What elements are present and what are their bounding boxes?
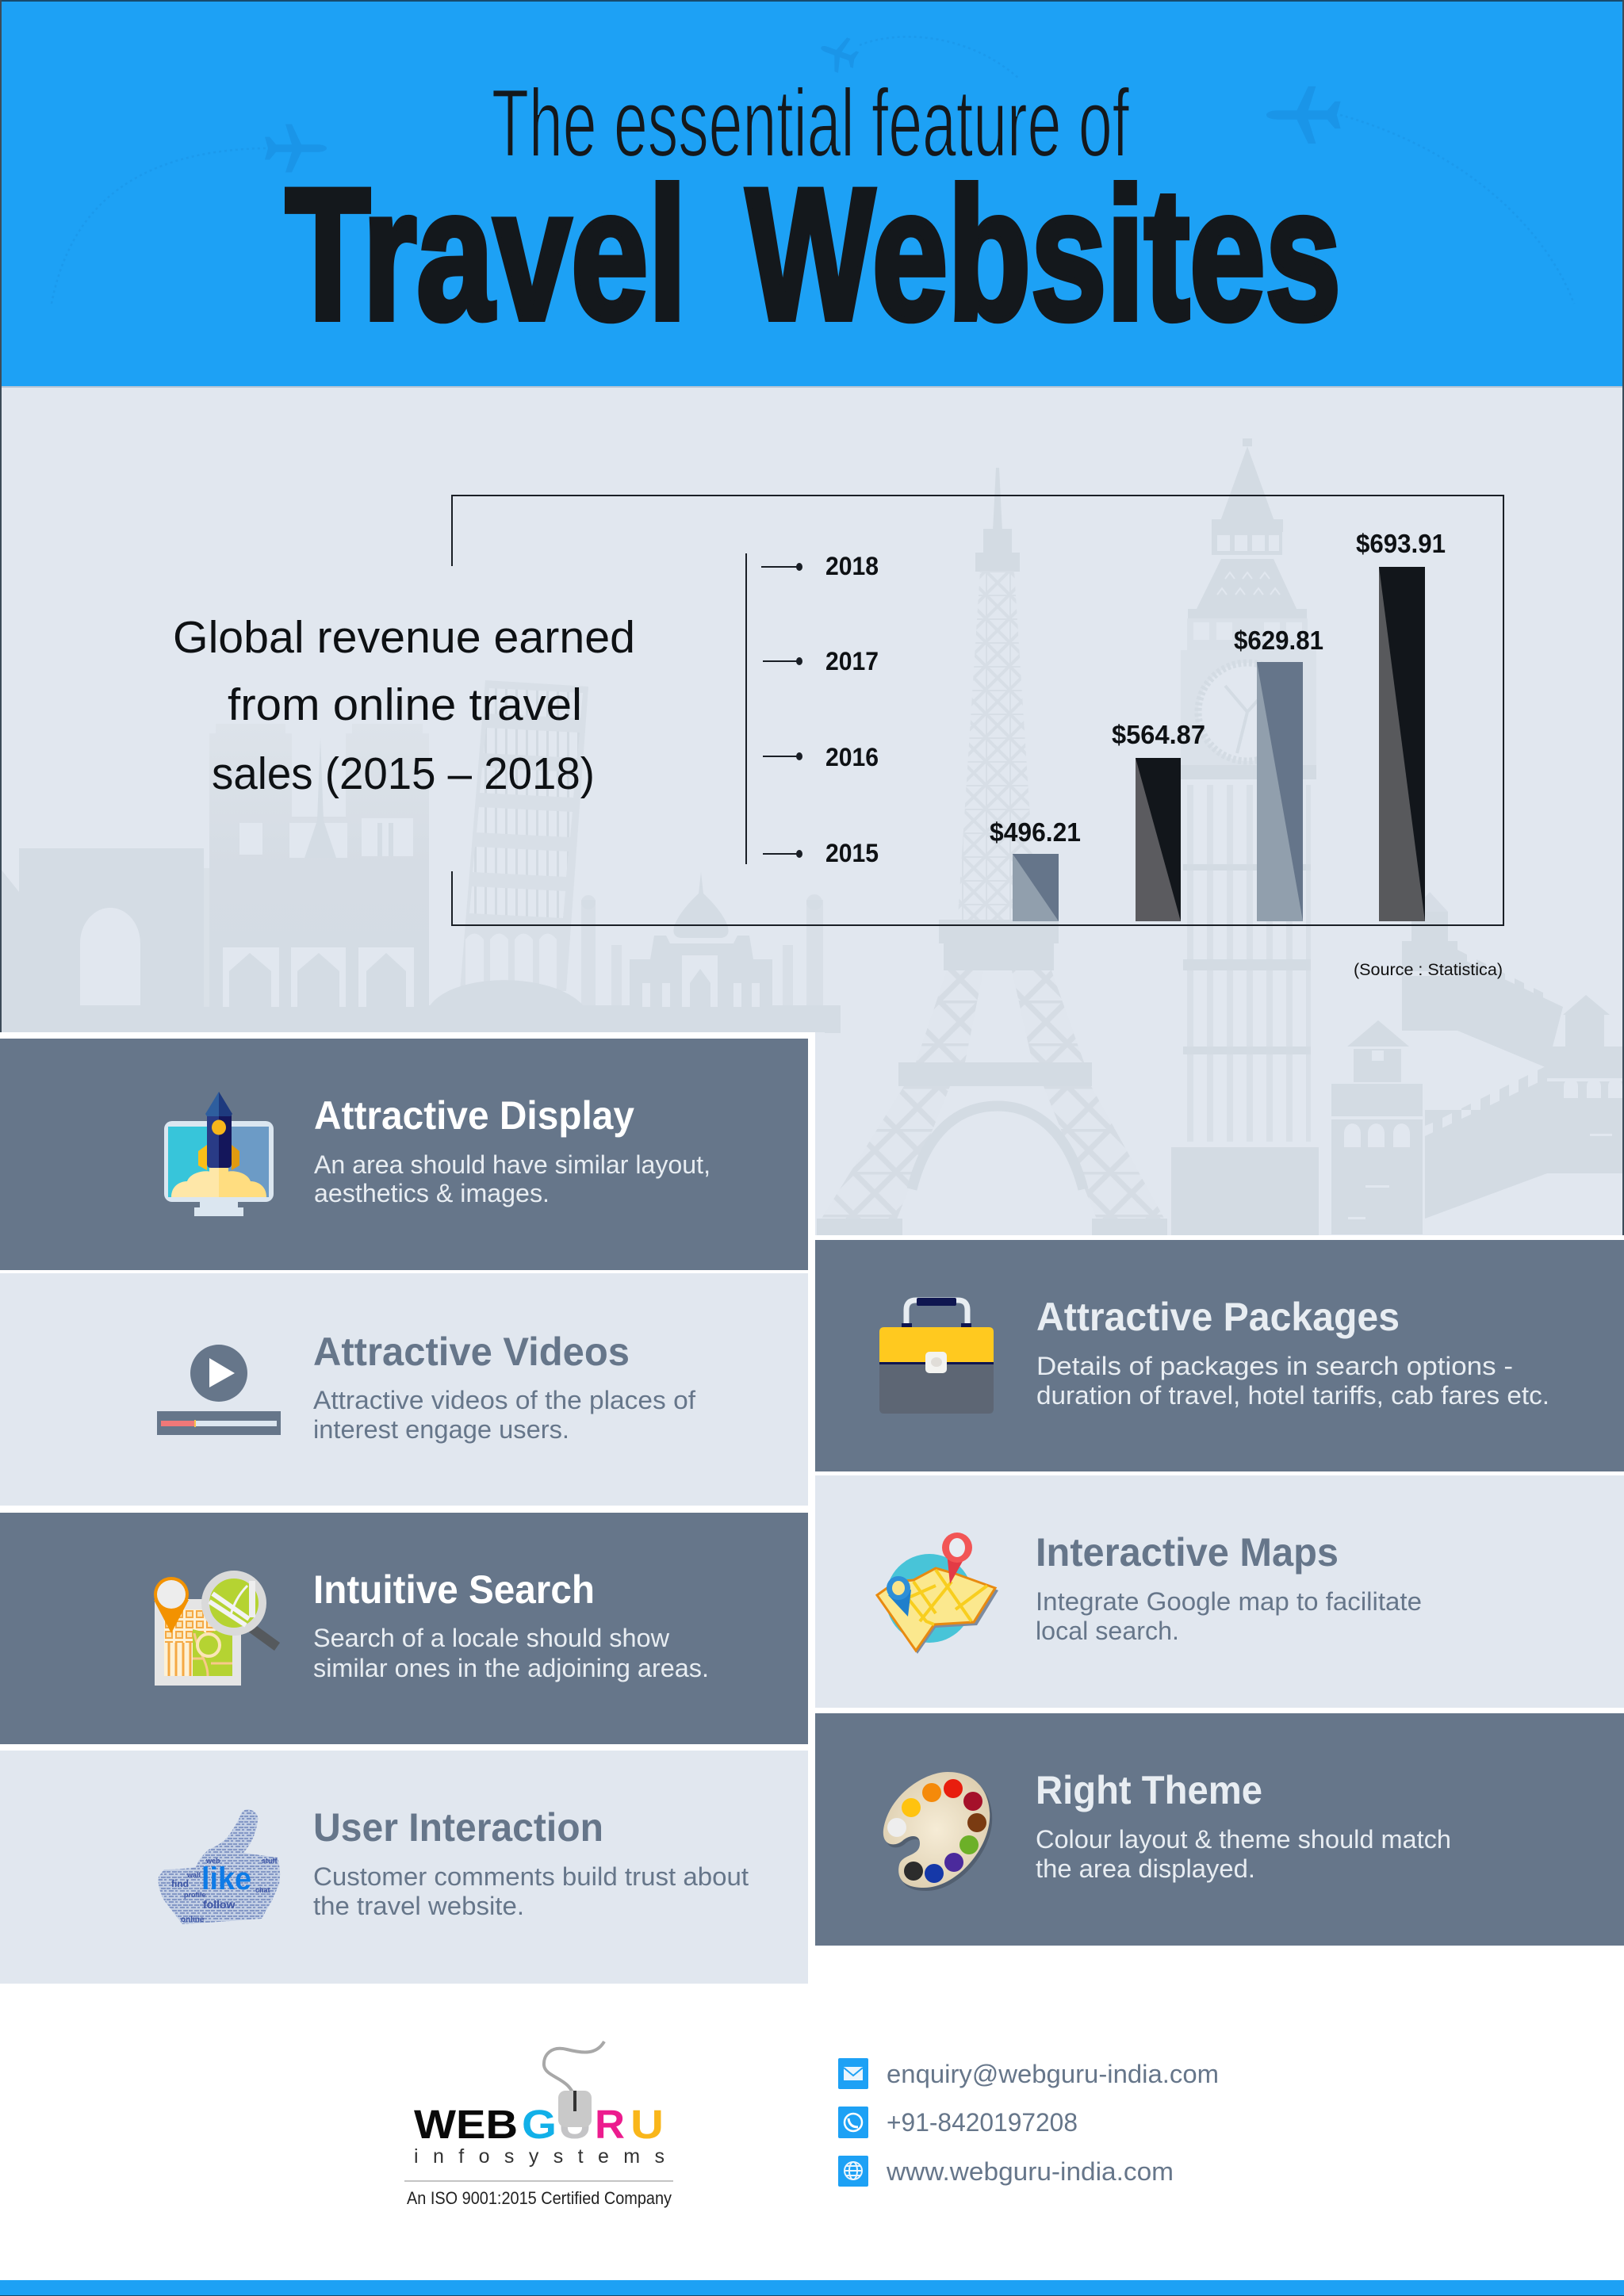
panel: interactive maps <box>815 1475 1624 1708</box>
text block: Details of packages in search options - <box>1036 1352 1513 1380</box>
icon: paint palette <box>883 1772 992 1891</box>
text block: Attractive videos of the places of <box>313 1386 695 1414</box>
heading: Interactive Maps <box>1036 1530 1339 1575</box>
heading: Attractive Display <box>314 1093 634 1138</box>
logo: webguru infosystems: U <box>558 2102 592 2147</box>
heading: Intuitive Search <box>313 1567 595 1612</box>
background skyline: great wall <box>1331 892 1624 1234</box>
icon: thumbs up word cloud: profile <box>184 1891 206 1899</box>
panel: right theme <box>815 1713 1624 1946</box>
icon: briefcase <box>879 1298 994 1414</box>
text block: Customer comments build trust about <box>313 1862 749 1891</box>
panel: intuitive search <box>0 1513 808 1744</box>
bar chart: $693.91 <box>1356 529 1446 558</box>
panel: chart <box>173 496 1503 979</box>
taj mahal <box>581 900 596 1007</box>
icon: thumbs up word cloud: stuff <box>262 1857 278 1865</box>
icon: thumbs up word cloud <box>159 1809 280 1924</box>
icon: rocket and monitor <box>164 1092 274 1216</box>
year axis: 2015 <box>825 839 879 867</box>
icon: folded map with pins <box>877 1533 998 1654</box>
text block <box>1036 1825 1451 1883</box>
title line 2: Travel <box>285 150 687 359</box>
text block <box>313 1624 709 1682</box>
heading: Right Theme <box>1036 1768 1262 1812</box>
year axis <box>746 552 879 867</box>
icon: thumbs up word cloud: like <box>201 1862 251 1896</box>
text block <box>1036 1352 1549 1410</box>
logo: webguru infosystems: R <box>595 2102 625 2147</box>
year axis: 2017 <box>825 647 879 675</box>
cathedral <box>209 724 429 1007</box>
text block: aesthetics & images. <box>314 1179 550 1207</box>
content background <box>0 387 1624 1243</box>
heading: Attractive Packages <box>1036 1295 1400 1339</box>
title line 1: The essential feature of <box>492 69 1130 177</box>
chart title: sales (2015 – 2018) <box>212 748 595 799</box>
text block <box>313 1862 749 1920</box>
bar chart: $564.87 <box>1112 720 1205 749</box>
text block: Integrate Google map to facilitate <box>1036 1587 1422 1616</box>
chart title: from online travel <box>228 679 582 730</box>
text block: Search of a locale should show <box>313 1624 670 1652</box>
logo: webguru infosystems: An ISO 9001:2015 Certified Company <box>407 2188 672 2208</box>
text block <box>314 1150 710 1207</box>
text block: An area should have similar layout, <box>314 1150 710 1179</box>
logo: webguru infosystems: G <box>522 2102 557 2147</box>
icon: thumbs up word cloud: wall <box>186 1871 201 1879</box>
bar chart: $496.21 <box>990 817 1081 847</box>
logo: webguru infosystems: U <box>630 2102 664 2147</box>
text block <box>1036 1587 1422 1645</box>
header band <box>0 0 1624 388</box>
text block: Colour layout & theme should match <box>1036 1825 1451 1854</box>
bar chart <box>990 529 1446 921</box>
heading: User Interaction <box>313 1805 603 1850</box>
footer band <box>0 2280 1624 2296</box>
icon: thumbs up word cloud: chat <box>255 1886 270 1894</box>
pisa tower <box>460 680 588 991</box>
icon: dashed flight paths and planes <box>52 30 1574 304</box>
background skyline: eiffel tower <box>817 468 1167 1236</box>
text block: the travel website. <box>313 1892 524 1920</box>
text block: interest engage users. <box>313 1415 569 1444</box>
heading: Attractive Videos <box>313 1330 630 1374</box>
text block: local search. <box>1036 1617 1179 1645</box>
gateway arch <box>0 848 204 1007</box>
icon: thumbs up word cloud: online <box>181 1915 205 1924</box>
dome behind tower <box>429 980 584 1007</box>
panel: attractive packages <box>815 1240 1624 1471</box>
logo: webguru infosystems: WEB <box>414 2102 518 2147</box>
chart title <box>173 612 635 799</box>
bar chart: $629.81 <box>1234 626 1323 655</box>
text block: similar ones in the adjoining areas. <box>313 1654 709 1682</box>
icon: video player <box>157 1345 281 1435</box>
year axis: 2018 <box>825 552 879 580</box>
contact: phone: +91-8420197208 <box>887 2108 1078 2137</box>
title line 2 <box>285 150 1341 359</box>
contact: email: enquiry@webguru-india.com <box>887 2060 1219 2088</box>
panel: attractive display <box>0 1039 808 1270</box>
contact: website: www.webguru-india.com <box>886 2157 1174 2186</box>
year axis: 2016 <box>825 743 879 771</box>
text block: duration of travel, hotel tariffs, cab fares etc. <box>1036 1381 1549 1410</box>
icon: thumbs up word cloud: follow <box>203 1898 236 1911</box>
icon: thumbs up word cloud: web <box>205 1857 220 1865</box>
panel: attractive videos <box>0 1273 808 1506</box>
text block <box>313 1386 695 1444</box>
panel: user interaction <box>0 1751 808 1984</box>
icon: thumbs up word cloud: find <box>171 1878 189 1889</box>
white panel gutters <box>0 1032 1624 2296</box>
chart title: Global revenue earned <box>173 612 635 663</box>
icon: map search <box>154 1575 280 1686</box>
chart frame <box>452 496 1503 925</box>
logo: webguru infosystems: infosystems <box>414 2145 665 2168</box>
logo: webguru infosystems <box>404 2042 673 2208</box>
background skyline: left landmarks <box>0 680 841 1033</box>
title line 2: Websites <box>746 150 1341 359</box>
background skyline: big ben <box>1171 438 1319 1236</box>
source note: (Source : Statistica) <box>1354 961 1503 979</box>
text block: the area displayed. <box>1036 1854 1255 1883</box>
